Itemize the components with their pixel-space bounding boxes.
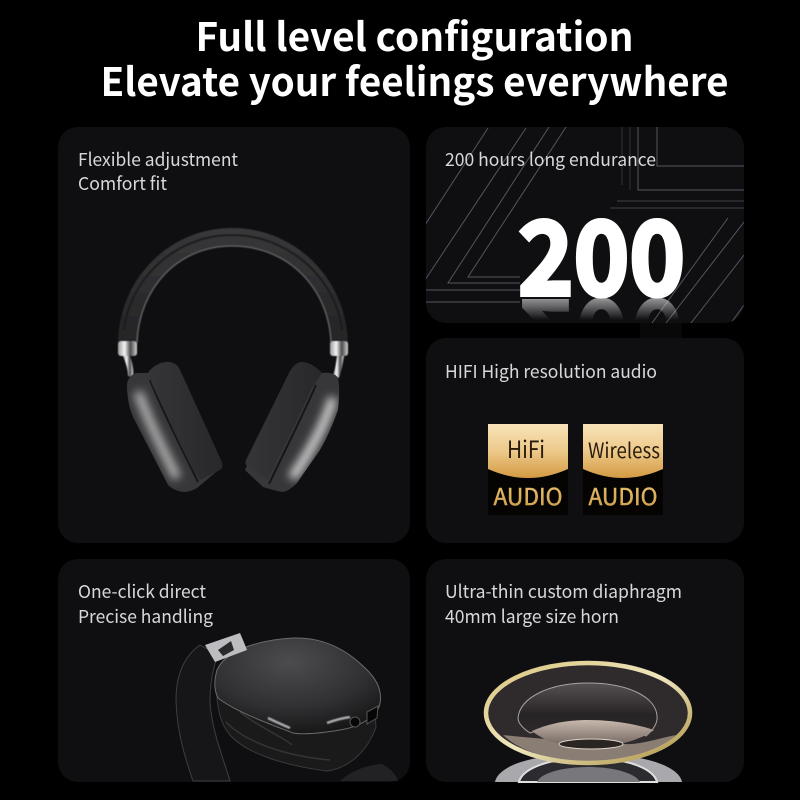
background line pattern xyxy=(425,127,744,323)
title xyxy=(100,7,728,108)
text: one-click direct precise handling: One-click direct xyxy=(78,578,206,604)
diaphragm body xyxy=(486,662,690,762)
badge: wireless audio: Wireless xyxy=(588,435,660,465)
badge: wireless audio xyxy=(583,424,663,515)
outer beige crescent xyxy=(503,735,676,762)
text: one-click direct precise handling xyxy=(78,578,213,629)
lower grey core xyxy=(537,767,640,782)
image: speaker diaphragm xyxy=(486,662,690,782)
headband strip xyxy=(176,645,230,781)
panel: diaphragm xyxy=(426,559,744,782)
title: Elevate your feelings everywhere xyxy=(100,52,728,108)
title: Full level configuration xyxy=(196,7,634,63)
text: ultra-thin custom diaphragm 40mm large size horn xyxy=(445,578,682,629)
headphone port xyxy=(350,717,360,727)
second cup corner xyxy=(340,764,398,781)
dome xyxy=(518,683,657,736)
charging port xyxy=(367,706,378,724)
panel: hifi audio xyxy=(426,338,744,543)
right hinge xyxy=(330,341,348,378)
badge: hifi audio xyxy=(488,424,568,515)
inner beige band xyxy=(532,720,654,747)
panel: flexible adjustment xyxy=(58,127,410,543)
badge: wireless audio: AUDIO xyxy=(588,478,658,512)
lower shell xyxy=(217,680,376,771)
gold ring xyxy=(486,663,690,763)
text: 200 hours long endurance: 200 hours long endurance xyxy=(445,146,656,172)
panel: one-click direct xyxy=(58,559,410,782)
faint reflection arc below panel xyxy=(640,323,682,338)
lower silver disc xyxy=(495,754,682,782)
text: flexible adjustment comfort fit xyxy=(78,146,238,196)
text: flexible adjustment comfort fit: Flexible adjustment xyxy=(78,146,238,172)
text: hifi high resolution audio: HIFI High resolution audio xyxy=(445,358,657,384)
badge: hifi audio: AUDIO xyxy=(494,478,562,512)
left ear cup xyxy=(127,362,222,492)
headband xyxy=(118,228,348,343)
text: flexible adjustment comfort fit: Comfort fit xyxy=(78,170,167,196)
image: ear cup close-up xyxy=(176,633,398,781)
left hinge xyxy=(118,341,137,378)
hinge slot xyxy=(218,641,234,656)
text: ultra-thin custom diaphragm 40mm large size horn: Ultra-thin custom diaphragm xyxy=(445,578,682,604)
cup top xyxy=(215,638,380,734)
centre slot xyxy=(559,739,623,749)
big number 200: 200 xyxy=(518,178,685,325)
text: one-click direct precise handling: Precise handling xyxy=(78,603,213,629)
hinge xyxy=(205,633,247,662)
badge: hifi audio: HiFi xyxy=(507,430,545,465)
image: headphones front view xyxy=(118,228,348,495)
shell seams xyxy=(226,712,330,760)
number reflection: 200 xyxy=(518,269,685,416)
cup highlights xyxy=(268,717,350,728)
panel: 200 hours endurance xyxy=(426,127,744,323)
lower dark ring xyxy=(519,758,657,782)
text: ultra-thin custom diaphragm 40mm large size horn: 40mm large size horn xyxy=(445,603,619,629)
right ear cup xyxy=(245,362,340,492)
